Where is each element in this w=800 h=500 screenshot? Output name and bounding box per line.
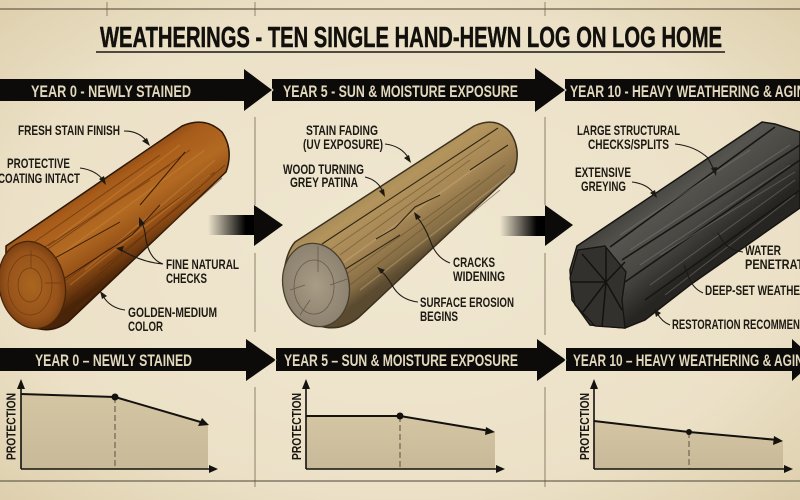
callout: wood turning grey patina: GREY PATINA <box>290 174 358 190</box>
callout: extensive greying: EXTENSIVE <box>575 164 631 180</box>
callout: large structural checks: CHECKS/SPLITS <box>588 136 669 152</box>
callouts: year 10 <box>575 122 800 332</box>
transition arrow: year 5 to year 10 <box>500 205 573 246</box>
callout: surface erosion begins <box>377 267 514 324</box>
callout: wood turning grey patina: WOOD TURNING <box>283 161 364 177</box>
axis label: PROTECTION <box>578 393 592 460</box>
lower timeline banner <box>0 339 800 381</box>
callout: large structural checks: LARGE STRUCTURAL <box>577 122 680 138</box>
callout: cracks widening <box>414 212 505 284</box>
lower banner label: year 0: YEAR 0 – NEWLY STAINED <box>35 352 192 370</box>
callout: cracks widening: WIDENING <box>453 268 505 284</box>
banner label: year 5: YEAR 5 - SUN & MOISTURE EXPOSURE <box>283 83 518 101</box>
lower banner label: year 5: YEAR 5 – SUN & MOISTURE EXPOSURE <box>284 352 518 370</box>
callout: fresh stain finish <box>18 122 150 146</box>
callout: protective coating intact: COATING INTACT <box>0 170 80 186</box>
callouts: year 5 <box>283 122 514 324</box>
chart: year 0 protection <box>4 379 218 473</box>
callout: deep-set weathering <box>684 265 800 298</box>
callout: water penetration <box>718 233 800 272</box>
callout: large structural checks <box>577 122 717 176</box>
callout: water penetration: WATER <box>745 242 781 258</box>
callout: restoration recommended <box>654 309 800 332</box>
callout: stain fading: (UV EXPOSURE) <box>303 136 383 152</box>
axis label: PROTECTION <box>4 393 18 460</box>
callout: golden-medium color: GOLDEN-MEDIUM <box>128 304 217 320</box>
log: year 0 stained <box>0 122 229 335</box>
callout: fine natural checks: FINE NATURAL <box>166 256 239 272</box>
callout: surface erosion begins: BEGINS <box>420 308 458 324</box>
callouts: year 0 <box>0 122 239 334</box>
log: year 10 heavy weathering <box>570 122 800 328</box>
log: year 5 fading <box>275 122 517 333</box>
callout: protective coating intact <box>0 155 106 186</box>
callout: wood turning grey patina <box>283 161 385 197</box>
transition arrow: year 0 to year 5 <box>208 205 283 246</box>
callout: fine natural checks <box>116 217 239 286</box>
callout: cracks widening: CRACKS <box>453 254 495 270</box>
callout: golden-medium color <box>100 291 217 334</box>
callout: extensive greying <box>575 164 657 198</box>
vertical dividers <box>255 117 545 487</box>
callout: extensive greying: GREYING <box>581 178 626 194</box>
axis label: PROTECTION <box>290 393 304 460</box>
callout: surface erosion begins: SURFACE EROSION <box>420 294 514 310</box>
chart: year 5 protection <box>290 379 505 473</box>
upper timeline banner <box>0 68 800 112</box>
callout: fine natural checks: CHECKS <box>166 270 207 286</box>
callout: golden-medium color: COLOR <box>128 318 163 334</box>
bottom rule <box>0 480 800 482</box>
callout: stain fading: STAIN FADING <box>306 122 378 138</box>
banner label: year 0: YEAR 0 - NEWLY STAINED <box>31 83 191 101</box>
callout: stain fading <box>303 122 411 163</box>
callout: fresh stain finish: FRESH STAIN FINISH <box>18 122 120 138</box>
callout: protective coating intact: PROTECTIVE <box>7 155 70 171</box>
top rule <box>0 2 800 16</box>
chart: year 10 protection <box>578 379 793 473</box>
